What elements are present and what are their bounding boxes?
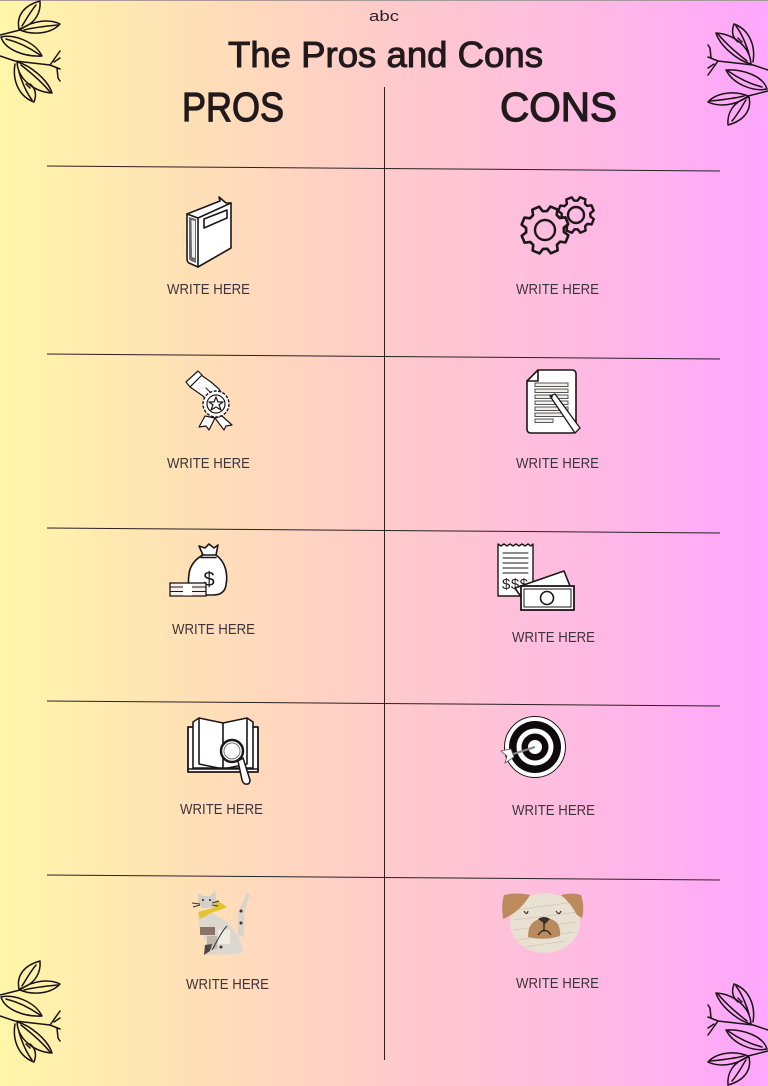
- decoration: leaves top left: [0, 1, 60, 102]
- text: cons row 3: WRITE HERE: [512, 630, 595, 646]
- text: pros row 1: WRITE HERE: [167, 282, 250, 298]
- title: The Pros and Cons: [228, 34, 543, 75]
- text: pros row 4: WRITE HERE: [180, 802, 263, 818]
- icon: document with pencil: [527, 370, 580, 433]
- text: cons row 1: WRITE HERE: [516, 282, 599, 298]
- table grid lines: [47, 87, 720, 1060]
- text: pros row 3: WRITE HERE: [172, 622, 255, 638]
- icon: receipt and banknotes: [498, 544, 574, 610]
- text: pros row 5: WRITE HERE: [186, 977, 269, 993]
- icon: hand with award badge: [186, 371, 232, 430]
- icon: gears: [514, 192, 599, 261]
- icon: book: [187, 197, 231, 267]
- decoration: leaves top right: [708, 24, 768, 125]
- heading: cons: CONS: [500, 84, 617, 130]
- decoration: leaves bottom left: [0, 961, 60, 1062]
- icon: target with dart: [501, 716, 566, 778]
- icon: newspaper dog face: [502, 893, 583, 953]
- text: cons row 5: WRITE HERE: [516, 976, 599, 992]
- icon: newspaper cat with yellow scarf: [192, 891, 250, 955]
- small label abc: abc: [369, 8, 400, 25]
- icon: money bag and cash: [170, 544, 227, 596]
- text: cons row 4: WRITE HERE: [512, 803, 595, 819]
- decoration: leaves bottom right: [708, 984, 768, 1085]
- icon: receipt and banknotes: $$$: [502, 576, 529, 593]
- text: pros row 2: WRITE HERE: [167, 456, 250, 472]
- text: cons row 2: WRITE HERE: [516, 456, 599, 472]
- heading: pros: PROS: [182, 84, 284, 130]
- icon: open book with magnifier: [188, 718, 258, 784]
- icon: money bag and cash: $: [203, 569, 215, 591]
